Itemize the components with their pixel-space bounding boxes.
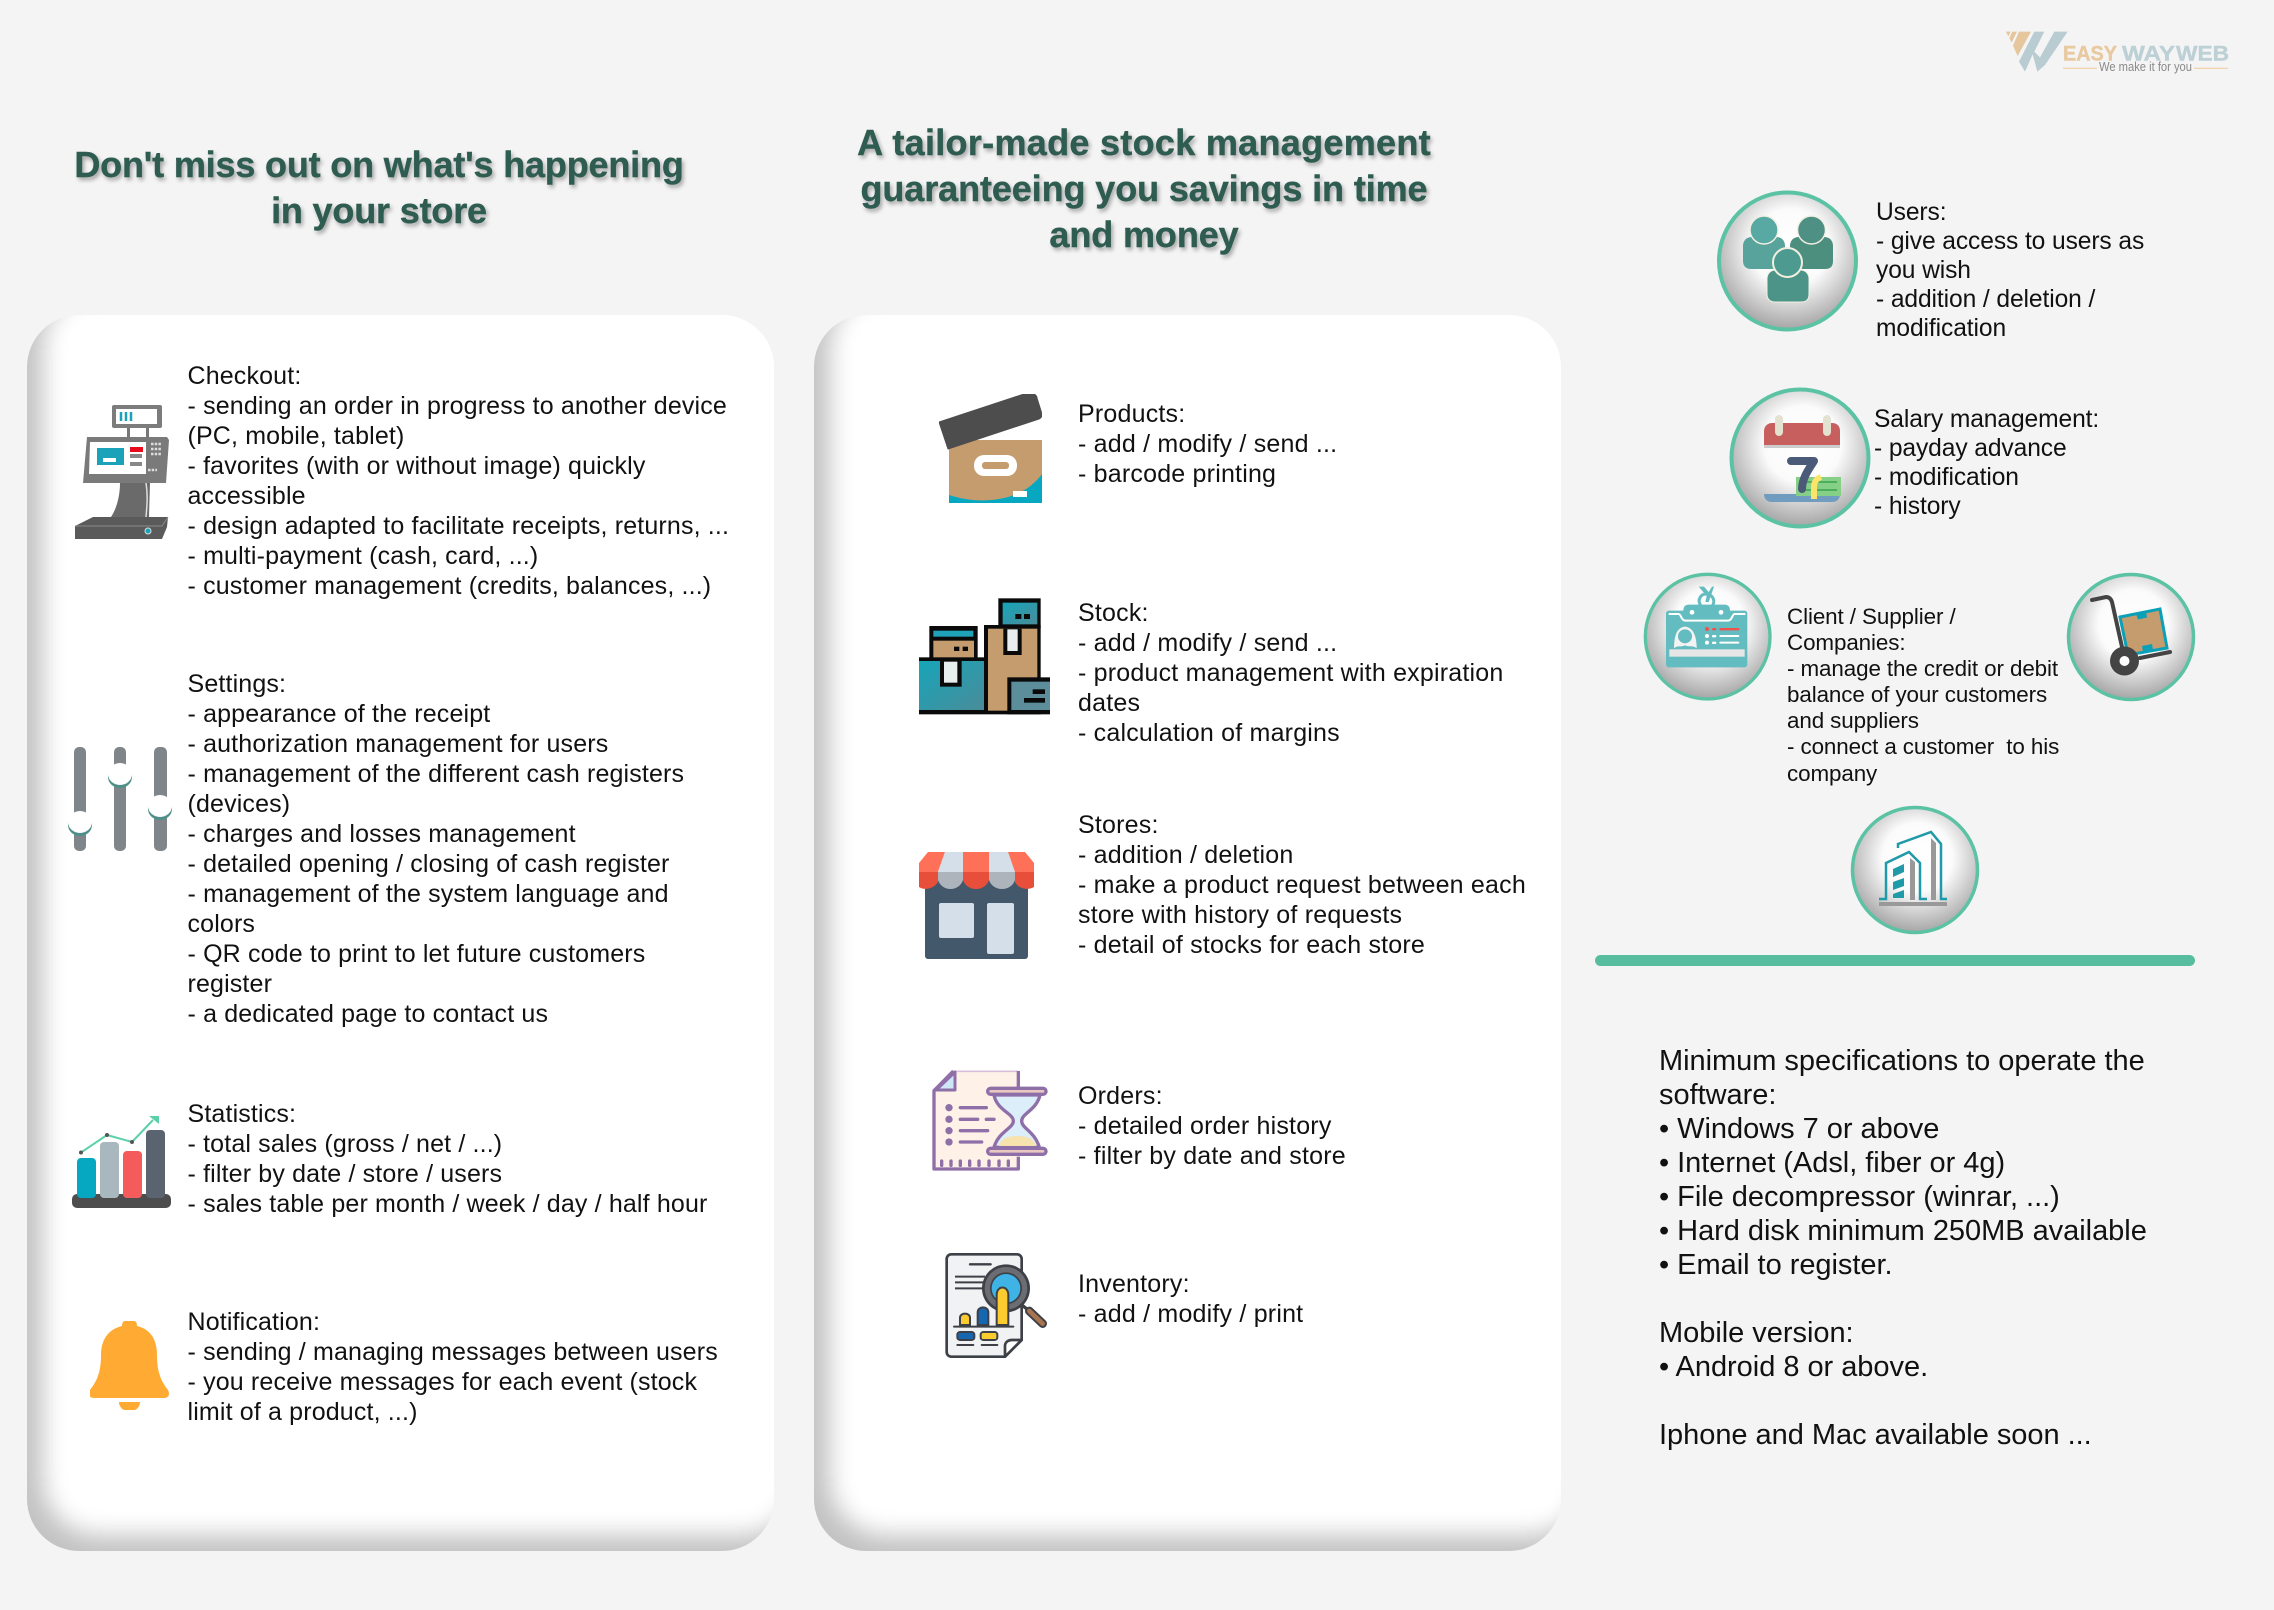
logo: Easy Way Web: WEB <box>2176 42 2229 66</box>
heading: store column <box>74 144 686 236</box>
text: minimum specifications: • Windows 7 or above <box>1659 1113 1939 1145</box>
text: stock: - product management with expiration <box>1078 659 1503 687</box>
text: orders: - detailed order history <box>1078 1112 1332 1140</box>
text: checkout: - multi-payment (cash, card, ...) <box>188 542 538 570</box>
text: salary management: - payday advance <box>1874 435 2067 462</box>
text: minimum specifications: • File decompressor (winrar, ...) <box>1659 1181 2060 1213</box>
text: checkout: accessible <box>188 482 306 510</box>
text: settings: - QR code to print to let future customers <box>188 940 645 968</box>
text: client supplier companies <box>1787 604 2059 786</box>
text: client supplier companies: - manage the credit or debit <box>1787 656 2058 681</box>
icon: company buildings circle <box>1850 806 1980 934</box>
text: minimum specifications: • Email to register. <box>1659 1249 1893 1281</box>
text: checkout: - design adapted to facilitate receipts, returns, ... <box>188 512 729 540</box>
text: statistics: - sales table per month / week / day / half hour <box>188 1190 707 1218</box>
logo: Easy Way Web <box>2006 32 2229 74</box>
text: orders: - filter by date and store <box>1078 1142 1346 1170</box>
text: settings: - charges and losses management <box>188 820 576 848</box>
text: client supplier companies: Companies: <box>1787 630 1905 655</box>
text: orders: Orders: <box>1078 1082 1163 1110</box>
text: checkout <box>188 362 729 600</box>
text: users: you wish <box>1876 257 1971 284</box>
text: statistics: - filter by date / store / users <box>188 1160 502 1188</box>
divider bar <box>1595 955 2195 966</box>
heading: store column: Don't miss out on what's happening <box>74 144 684 184</box>
text: notification: limit of a product, ...) <box>188 1398 418 1426</box>
text: client supplier companies: company <box>1787 761 1877 786</box>
text: settings: register <box>188 970 272 998</box>
text: minimum specifications: • Internet (Adsl, fiber or 4g) <box>1659 1147 2005 1179</box>
icon: statistics bars <box>72 1116 171 1208</box>
text: stock: - calculation of margins <box>1078 719 1340 747</box>
text: client supplier companies: - connect a customer to his <box>1787 734 2059 759</box>
text: salary management: - modification <box>1874 464 2019 491</box>
text: stores: store with history of requests <box>1078 901 1402 929</box>
panel: store features <box>27 315 774 1551</box>
icon: storefront <box>919 852 1034 959</box>
text: settings: - management of the system language and <box>188 880 669 908</box>
text: client supplier companies: balance of your customers <box>1787 682 2047 707</box>
text: settings: colors <box>188 910 255 938</box>
text: products: - add / modify / send ... <box>1078 430 1337 458</box>
text: inventory: - add / modify / print <box>1078 1300 1303 1328</box>
icon: products box <box>939 394 1042 503</box>
icon: inventory report with magnifier <box>945 1253 1047 1358</box>
text: products: - barcode printing <box>1078 460 1276 488</box>
text: notification: - sending / managing messages between users <box>188 1338 718 1366</box>
text: salary management: Salary management: <box>1874 406 2099 433</box>
icon: checkout terminal <box>75 405 169 539</box>
text: minimum specifications: Mobile version: <box>1659 1317 1854 1349</box>
text: checkout: - favorites (with or without image) quickly <box>188 452 646 480</box>
icon: orders document and hourglass <box>932 1070 1048 1171</box>
text: salary management <box>1874 406 2099 520</box>
text: minimum specifications: Minimum specifications to operate the <box>1659 1044 2145 1076</box>
text: inventory <box>1078 1270 1303 1328</box>
text: stores: - detail of stocks for each store <box>1078 931 1425 959</box>
logo: Easy Way Web: EASY <box>2063 42 2117 66</box>
text: users: modification <box>1876 315 2006 342</box>
text: checkout: Checkout: <box>188 362 301 390</box>
text: minimum specifications: software: <box>1659 1079 1776 1111</box>
text: notification: Notification: <box>188 1308 320 1336</box>
text: settings: - a dedicated page to contact us <box>188 1000 548 1028</box>
text: salary management: - history <box>1874 493 1961 520</box>
text: statistics: - total sales (gross / net / ...) <box>188 1130 502 1158</box>
text: stores: - make a product request between each <box>1078 871 1526 899</box>
text: products <box>1078 400 1337 488</box>
text: stock: - add / modify / send ... <box>1078 629 1337 657</box>
text: users: - give access to users as <box>1876 228 2144 255</box>
text: users <box>1876 199 2144 342</box>
text: client supplier companies: Client / Supplier / <box>1787 604 1956 629</box>
text: stock <box>1078 599 1503 747</box>
logo: Easy Way Web: WAY <box>2122 42 2175 66</box>
text: notification <box>188 1308 718 1426</box>
text: stores <box>1078 811 1526 959</box>
heading: stock column: guaranteeing you savings in time <box>861 168 1427 209</box>
text: orders <box>1078 1082 1346 1170</box>
heading: store column: in your store <box>271 190 487 230</box>
text: stores: Stores: <box>1078 811 1159 839</box>
text: products: Products: <box>1078 400 1185 428</box>
text: checkout: - customer management (credits, balances, ...) <box>188 572 711 600</box>
text: settings <box>188 670 684 1028</box>
text: stock: Stock: <box>1078 599 1149 627</box>
text: settings: - appearance of the receipt <box>188 700 490 728</box>
text: checkout: (PC, mobile, tablet) <box>188 422 404 450</box>
text: notification: - you receive messages for each event (stock <box>188 1368 697 1396</box>
panel: stock features <box>814 315 1561 1551</box>
icon: salary calendar circle <box>1730 388 1870 528</box>
text: users: - addition / deletion / <box>1876 286 2095 313</box>
icon: settings sliders <box>68 747 172 851</box>
text: minimum specifications: • Hard disk minimum 250MB available <box>1659 1215 2147 1247</box>
text: stock: dates <box>1078 689 1140 717</box>
text: minimum specifications: Iphone and Mac available soon ... <box>1659 1419 2092 1451</box>
heading: stock column: and money <box>1049 214 1239 255</box>
text: statistics <box>188 1100 707 1218</box>
text: settings: Settings: <box>188 670 286 698</box>
text: minimum specifications: • Android 8 or above. <box>1659 1351 1928 1383</box>
icon: users circle <box>1717 190 1858 332</box>
text: settings: - detailed opening / closing of cash register <box>188 850 670 878</box>
text: client supplier companies: and suppliers <box>1787 708 1919 733</box>
text: statistics: Statistics: <box>188 1100 296 1128</box>
icon: stock boxes <box>919 598 1050 714</box>
logo: Easy Way Web: We make it for you <box>2099 60 2192 74</box>
text: inventory: Inventory: <box>1078 1270 1190 1298</box>
heading: stock column: A tailor-made stock management <box>857 122 1431 163</box>
text: stores: - addition / deletion <box>1078 841 1293 869</box>
icon: hand trolley circle <box>2066 572 2196 702</box>
icon: client card circle <box>1644 572 1772 701</box>
text: checkout: - sending an order in progress to another device <box>188 392 727 420</box>
heading: stock column <box>857 122 1434 260</box>
text: minimum specifications <box>1659 1044 2147 1451</box>
text: settings: - management of the different cash registers <box>188 760 684 788</box>
text: settings: - authorization management for users <box>188 730 608 758</box>
text: users: Users: <box>1876 199 1946 226</box>
text: settings: (devices) <box>188 790 290 818</box>
icon: notification bell <box>90 1321 169 1410</box>
